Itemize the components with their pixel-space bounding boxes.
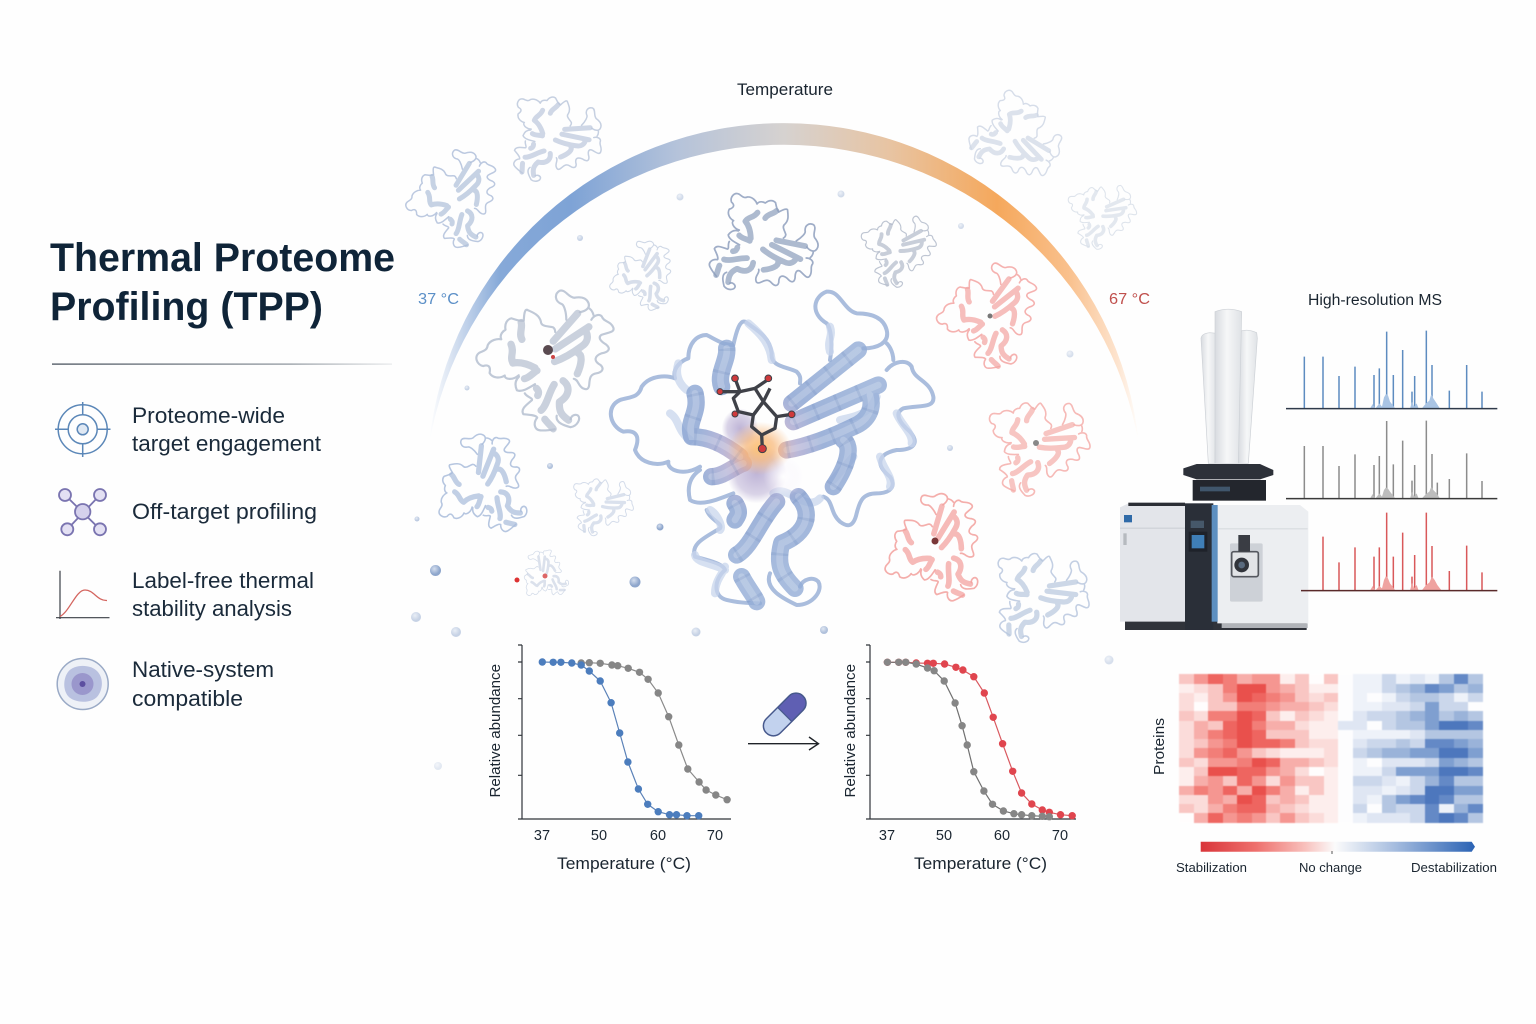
protein 11 [413, 416, 555, 558]
title: Thermal Proteome [50, 236, 395, 280]
legend labels [1176, 860, 1497, 875]
icon: cell [57, 658, 108, 710]
text: native-system compatible: Native-system [132, 657, 274, 682]
x axis title: Temperature (°C) [914, 854, 1047, 873]
y axis title: Relative abundance [487, 664, 504, 798]
protein 14 [969, 528, 1105, 663]
arrow [748, 737, 818, 750]
small ligands [514, 314, 1039, 582]
text: proteome-wide target engagement: target engagement [132, 431, 322, 456]
text: label-free thermal stability analysis [132, 568, 314, 621]
title: Profiling (TPP) [50, 285, 323, 329]
x tick labels [879, 828, 1068, 844]
label: temperature: Temperature [737, 81, 833, 99]
red curve [887, 662, 1072, 816]
central protein with ligand [611, 292, 933, 605]
line chart: drug treated melting curves [842, 645, 1076, 873]
translucent ribbon sections [670, 323, 912, 593]
x tick labels [534, 828, 723, 844]
heatmap [1178, 673, 1484, 824]
x tick labels: 70 [707, 828, 723, 844]
text: label-free thermal stability analysis: stability analysis [132, 596, 292, 621]
text: off-target profiling: Off-target profiling [132, 499, 317, 524]
mass spectra [1286, 331, 1497, 591]
protein 10 [969, 379, 1102, 511]
protein 13 [863, 476, 1012, 624]
instrument body [1120, 503, 1308, 630]
icon: network [59, 489, 106, 535]
protein 9 [467, 283, 629, 441]
protein 1 [486, 71, 619, 203]
helix turns [691, 348, 878, 602]
protein 3 [956, 79, 1072, 196]
protein 4 [1058, 173, 1143, 257]
protein 5 [597, 230, 691, 324]
x tick labels: 50 [936, 828, 952, 844]
line chart: vehicle melting curves [487, 645, 731, 873]
y axis title: Relative abundance [842, 664, 859, 798]
spectrum: red [1301, 513, 1497, 591]
protein 12 [558, 463, 642, 547]
mass spectrometer instrument [1120, 309, 1308, 630]
x axis title: Temperature (°C) [557, 854, 691, 873]
icon: drug capsule [759, 689, 810, 740]
blue curve [542, 662, 699, 816]
grey curve [581, 663, 727, 800]
axes [518, 645, 731, 819]
floating spheres [411, 190, 1114, 770]
protein 2 [394, 139, 517, 261]
icon: stability curve [56, 571, 110, 619]
protein 8 [927, 254, 1054, 380]
x tick labels: 50 [591, 828, 607, 844]
spectrum: blue [1286, 331, 1497, 409]
grey curve [887, 662, 1049, 817]
small proteins [394, 71, 1143, 663]
panel: feature list [55, 402, 322, 711]
text: native-system compatible: compatible [132, 686, 243, 711]
x tick labels: 37 [534, 828, 550, 844]
title [50, 236, 395, 329]
legend labels: Destabilization [1411, 860, 1497, 875]
label: 37 C: 37 °C [418, 291, 459, 308]
axes [866, 645, 1076, 819]
temperature arc [429, 123, 1139, 445]
dark collar [1183, 464, 1273, 501]
icon: target [55, 402, 110, 457]
legend labels: Stabilization [1176, 860, 1247, 875]
x tick labels: 70 [1052, 828, 1068, 844]
protein helices [691, 348, 878, 602]
text: label-free thermal stability analysis: Label-free thermal [132, 568, 314, 593]
text: proteome-wide target engagement [132, 403, 322, 456]
protein 15 [511, 542, 579, 610]
legend colour bar [1201, 842, 1475, 852]
ligand molecule [717, 375, 795, 453]
label: high-resolution MS: High-resolution MS [1308, 292, 1442, 309]
protein backbone loops [611, 292, 933, 605]
x tick labels: 60 [994, 828, 1010, 844]
binding site shading [722, 408, 787, 503]
label: proteins: Proteins [1151, 718, 1168, 775]
x tick labels: 37 [879, 828, 895, 844]
heatmap legend [1176, 842, 1497, 875]
text: native-system compatible [132, 657, 274, 711]
x tick labels: 60 [650, 828, 666, 844]
legend labels: No change [1299, 860, 1362, 875]
spectrum: grey [1286, 421, 1497, 499]
protein 7 [854, 207, 941, 293]
text: proteome-wide target engagement: Proteome-wide [132, 403, 285, 428]
helix highlights [691, 348, 878, 602]
binding site glow [728, 422, 803, 497]
quadrupole towers [1201, 309, 1257, 463]
label: 67 C: 67 °C [1109, 291, 1150, 308]
protein 6 [683, 168, 837, 323]
